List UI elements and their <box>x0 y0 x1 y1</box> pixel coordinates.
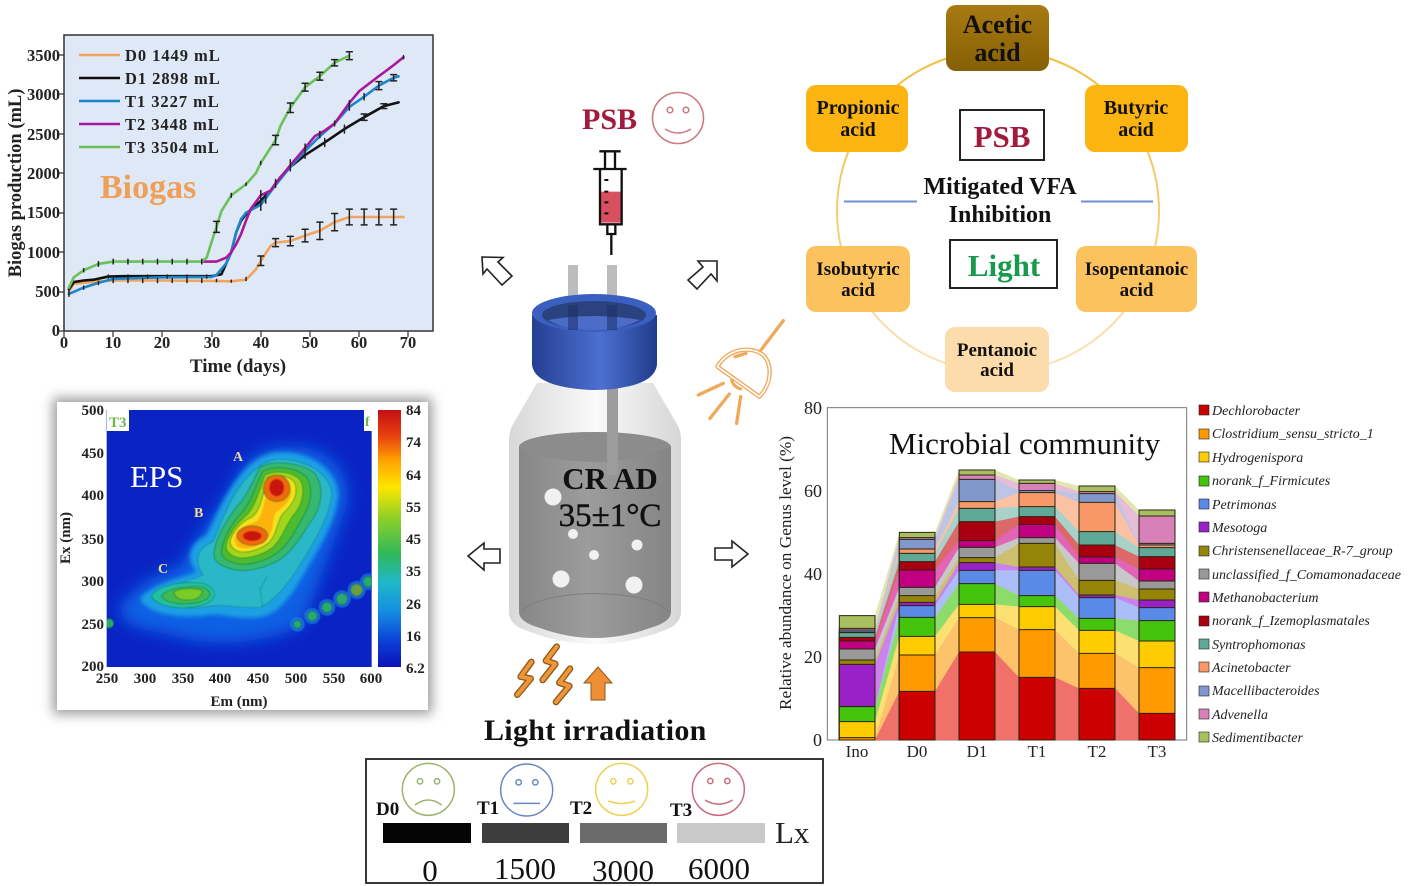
arrow: to VFA panel <box>688 261 717 289</box>
Pentanoic acid node: Pentanoic <box>957 340 1037 361</box>
Isopentanoic acid node <box>1076 246 1197 312</box>
y-axis tick labels: 0 <box>52 321 60 340</box>
Acetic acid node: acid <box>974 38 1021 67</box>
x ticks: 300 <box>134 671 156 687</box>
x ticks <box>96 671 382 687</box>
biogas label: Biogas <box>100 169 196 206</box>
chart legend: T2 3448 mL <box>125 115 220 134</box>
x-axis tick labels: 50 <box>302 333 318 352</box>
species legend: norank_f_Firmicutes <box>1212 474 1331 489</box>
bubbles <box>544 488 642 594</box>
species legend: Syntrophomonas <box>1212 638 1306 653</box>
colour scale: 84 <box>406 403 422 419</box>
Acetic acid node: Acetic <box>963 10 1032 39</box>
x labels: D1 <box>967 742 987 761</box>
x ticks: 500 <box>285 671 307 687</box>
y ticks: 500 <box>82 403 104 419</box>
chart legend: D0 1449 mL <box>125 46 221 65</box>
center caption <box>920 170 1078 230</box>
axis titles: Ex (nm) <box>58 512 74 564</box>
y-axis tick labels: 2000 <box>27 164 60 183</box>
PSB box <box>960 110 1044 160</box>
y-axis tick labels: 3000 <box>27 85 60 104</box>
species legend: Acinetobacter <box>1211 661 1291 676</box>
species legend: Petrimonas <box>1211 498 1277 513</box>
y ticks: 0 <box>813 730 822 750</box>
x-axis tick labels: 60 <box>351 333 367 352</box>
Lx unit: Lx <box>775 815 810 850</box>
x ticks: 250 <box>96 671 118 687</box>
x-axis tick labels: 0 <box>60 333 68 352</box>
x labels: T3 <box>1148 742 1166 761</box>
intensity values: 6000 <box>688 851 750 886</box>
species legend: Methanobacterium <box>1211 591 1319 606</box>
x labels: T2 <box>1088 742 1106 761</box>
reactor label: CR AD <box>562 461 658 496</box>
x ticks: 400 <box>209 671 231 687</box>
Butyric acid node: acid <box>1118 119 1154 141</box>
Acetic acid node <box>946 5 1049 71</box>
x labels: T1 <box>1028 742 1046 761</box>
y ticks: 250 <box>82 617 104 633</box>
icon: light bolts <box>517 647 570 702</box>
Propionic acid node <box>806 85 908 152</box>
group labels: T3 <box>670 800 692 821</box>
species legend: Clostridium_sensu_stricto_1 <box>1212 427 1374 442</box>
x-axis title: Time (days) <box>190 356 286 377</box>
colour scale: 6.2 <box>406 661 425 677</box>
species legend: Christensenellaceae_R-7_group <box>1212 544 1393 559</box>
species legend: Mesotoga <box>1211 521 1267 536</box>
group labels <box>376 798 692 821</box>
y ticks <box>82 403 104 675</box>
x-axis tick labels: 30 <box>204 333 220 352</box>
x ticks: 350 <box>172 671 194 687</box>
group labels: D0 <box>376 799 399 820</box>
central rod <box>607 385 618 475</box>
axis titles <box>58 512 268 710</box>
y ticks: 60 <box>804 481 822 501</box>
Light box <box>950 240 1057 288</box>
colour scale: 64 <box>406 468 422 484</box>
chart legend: T3 3504 mL <box>125 138 220 157</box>
Light box: Light <box>968 248 1041 283</box>
panel: VFA inhibition ring <box>806 5 1197 392</box>
icon: syringe <box>593 151 627 255</box>
f tag <box>364 410 372 431</box>
x-axis tick labels: 20 <box>154 333 170 352</box>
center caption: Mitigated VFA <box>923 174 1077 200</box>
temperature label: 35±1°C <box>559 498 661 534</box>
panel: light intensity legend <box>366 759 823 886</box>
faces <box>402 763 744 816</box>
x-axis tick labels: 40 <box>253 333 269 352</box>
species legend: Dechlorobacter <box>1211 404 1301 419</box>
arrow: to EPS map <box>468 543 500 570</box>
icon: light arrow <box>584 667 612 700</box>
blue cap <box>532 294 657 390</box>
x labels: D0 <box>907 742 927 761</box>
x labels: Ino <box>846 742 868 761</box>
y-axis tick labels: 3500 <box>27 46 60 65</box>
chart legend <box>79 46 221 157</box>
colour scale: 26 <box>406 597 422 613</box>
y ticks: 450 <box>82 446 104 462</box>
x ticks: 600 <box>360 671 382 687</box>
Isobutyric acid node <box>806 246 910 312</box>
peak labels <box>158 450 244 577</box>
colour scale: 35 <box>406 564 421 580</box>
chart legend: T1 3227 mL <box>125 92 220 111</box>
species legend: norank_f_Izemoplasmatales <box>1212 614 1370 629</box>
y ticks: 40 <box>804 564 822 584</box>
intensity values: 1500 <box>494 851 556 886</box>
stacked bars and ribbons <box>827 408 1187 740</box>
icon: happy face PSB <box>652 92 704 144</box>
axis titles: Em (nm) <box>210 694 268 710</box>
Propionic acid node: acid <box>840 119 876 141</box>
liquid <box>519 432 671 638</box>
y-axis title: Biogas production (mL) <box>6 89 26 277</box>
colour scale: 74 <box>406 435 422 451</box>
y-axis tick labels: 1000 <box>27 243 60 262</box>
EPS label: EPS <box>130 459 183 494</box>
y-axis tick labels: 1500 <box>27 203 60 222</box>
x ticks: 450 <box>247 671 269 687</box>
contour plot <box>104 410 377 667</box>
y ticks: 400 <box>82 488 104 504</box>
y-axis tick labels <box>27 46 60 340</box>
chart legend: D1 2898 mL <box>125 69 221 88</box>
peak labels: A <box>233 450 244 465</box>
y-axis title: Relative abundance on Genus level (%) <box>776 436 795 710</box>
species legend <box>1199 404 1401 746</box>
colour scale: 55 <box>406 500 421 516</box>
colour scale: 45 <box>406 532 421 548</box>
x-axis tick labels <box>60 333 416 352</box>
icon: lamp <box>698 321 783 423</box>
arrow: to biogas chart <box>482 257 512 285</box>
T3 tag: T3 <box>109 415 127 431</box>
PSB box: PSB <box>974 119 1030 154</box>
species legend: Hydrogenispora <box>1211 451 1303 466</box>
Pentanoic acid node: acid <box>980 360 1014 381</box>
y ticks: 300 <box>82 574 104 590</box>
Butyric acid node <box>1085 85 1188 152</box>
y ticks <box>804 398 822 750</box>
f tag: f <box>365 415 370 430</box>
panel: EPS fluorescence contour map <box>53 398 432 714</box>
Propionic acid node: Propionic <box>817 97 900 119</box>
Pentanoic acid node <box>945 327 1049 392</box>
y ticks: 200 <box>82 659 104 675</box>
y-axis tick labels: 2500 <box>27 125 60 144</box>
species legend: Advenella <box>1211 708 1268 723</box>
group labels: T1 <box>477 798 499 819</box>
Butyric acid node: Butyric <box>1104 97 1168 119</box>
species legend: unclassified_f_Comamonadaceae <box>1212 568 1401 583</box>
group labels: T2 <box>570 798 592 819</box>
Isopentanoic acid node: acid <box>1120 280 1154 301</box>
x ticks: 550 <box>323 671 345 687</box>
glass body <box>509 383 681 644</box>
Isobutyric acid node: acid <box>841 280 875 301</box>
tubes <box>568 265 617 320</box>
x-axis tick labels: 10 <box>105 333 121 352</box>
colour scale <box>378 403 425 677</box>
chart title: Microbial community <box>889 426 1161 461</box>
center caption: Inhibition <box>949 202 1051 228</box>
y ticks: 20 <box>804 647 822 667</box>
colour scale: 16 <box>406 629 422 645</box>
peak labels: B <box>194 506 203 521</box>
x-axis tick labels: 70 <box>400 333 416 352</box>
y-axis tick labels: 500 <box>35 282 60 301</box>
T3 tag <box>107 410 129 431</box>
y ticks: 350 <box>82 532 104 548</box>
species legend: Sedimentibacter <box>1212 731 1304 746</box>
y ticks: 80 <box>804 398 822 418</box>
Isobutyric acid node: Isobutyric <box>816 259 900 280</box>
intensity bars <box>383 823 765 843</box>
panel: central bottle reactor <box>509 265 681 644</box>
peak labels: C <box>158 562 168 577</box>
panel: stacked bar chart <box>776 398 1401 761</box>
PSB label: PSB <box>582 103 637 136</box>
Isopentanoic acid node: Isopentanoic <box>1085 259 1188 280</box>
biogas curves <box>69 52 403 296</box>
species legend: Macellibacteroides <box>1211 684 1320 699</box>
intensity values <box>422 851 750 886</box>
line chart: biogas production <box>6 35 433 377</box>
arrow: to microbial chart <box>715 541 748 567</box>
x labels <box>846 742 1166 761</box>
light irradiation heading: Light irradiation <box>484 714 707 747</box>
